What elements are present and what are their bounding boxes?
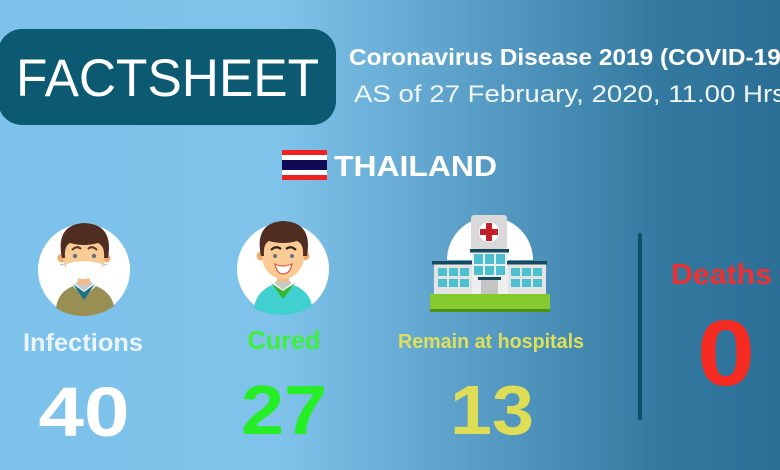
icon: masked man [38,223,130,316]
label: cured: Cured [248,325,320,355]
heading: Thailand: THAILAND [334,151,497,183]
number: cured: 27 [241,371,327,449]
icon: Thai flag [282,150,327,180]
heading: disease title: Coronavirus Disease 2019 (COVID-19) [349,44,780,70]
number: infections: 40 [38,373,130,451]
label: remain at hospitals: Remain at hospitals [398,330,584,353]
divider [638,233,642,420]
subheading: date: AS of 27 February, 2020, 11.00 Hrs [354,81,780,108]
number: deaths: 0 [697,301,755,405]
label: infections: Infections [23,329,143,357]
number: remain at hospitals: 13 [450,371,534,449]
panel: deaths [671,259,772,405]
panel: cured [237,221,329,449]
panel: remain at hospitals [398,215,584,449]
label: deaths: Deaths [671,259,772,291]
factsheet badge: FACTSHEET [16,49,319,108]
icon: hospital [430,215,550,312]
icon: smiling man [237,221,329,315]
panel: infections [23,223,143,451]
factsheet badge [0,29,336,125]
